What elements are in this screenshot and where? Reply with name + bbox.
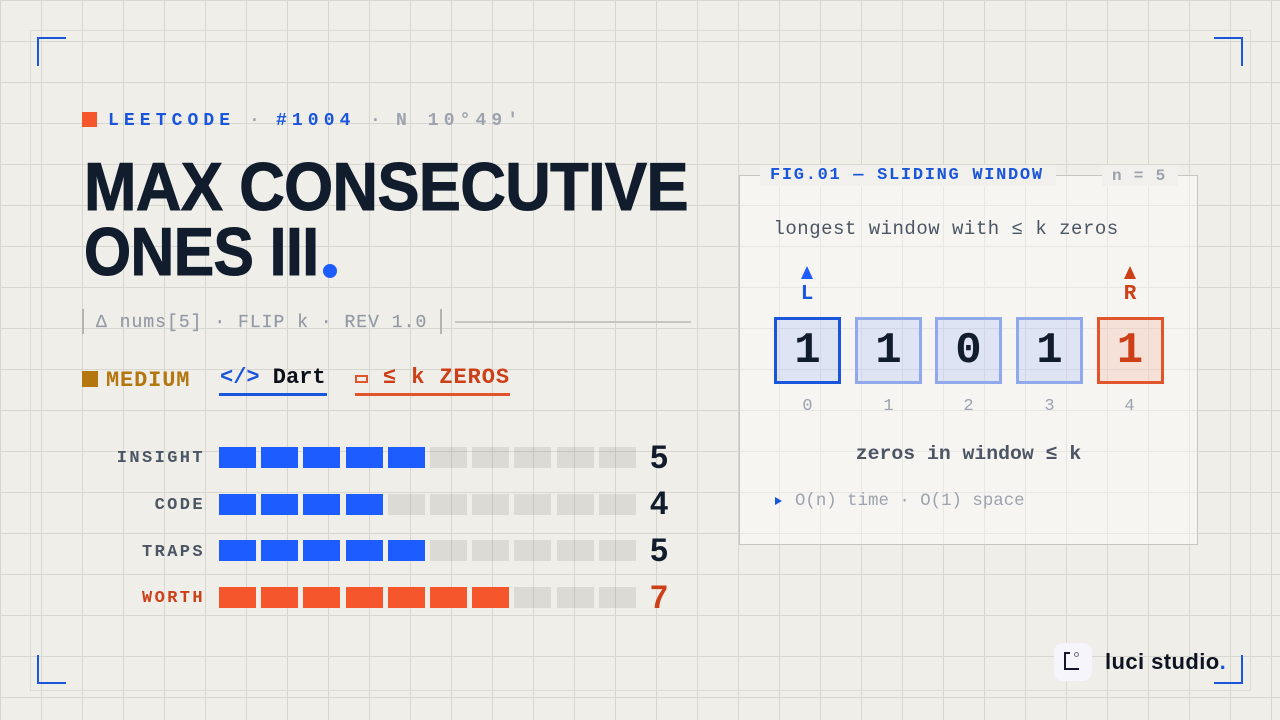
logo icon [1054, 643, 1092, 681]
cell 2 [935, 317, 1002, 384]
meta rule [455, 321, 691, 322]
cell 0 [774, 317, 841, 384]
R text: R [1124, 283, 1136, 306]
logo bracket [1064, 652, 1079, 670]
score: worth: 7 [650, 579, 668, 615]
corner mark: top left [37, 37, 66, 66]
L arrow [800, 266, 812, 279]
cell 1: 1 [875, 326, 902, 376]
complexity note [775, 492, 1025, 511]
eyebrow square [82, 112, 97, 127]
title dot [323, 264, 337, 278]
panel count tag [1102, 165, 1178, 186]
dart text: </> Dart [220, 365, 326, 390]
medium text: MEDIUM [106, 368, 190, 393]
bar: traps [219, 540, 636, 561]
panel subtitle: longest window with ≤ k zeros [774, 218, 1119, 240]
index 3: 3 [1044, 397, 1055, 416]
score: insight: 5 [650, 439, 668, 475]
bar: code [219, 494, 636, 515]
label: worth: WORTH [142, 589, 205, 608]
label: traps: TRAPS [142, 543, 205, 562]
pointer: L [801, 266, 813, 306]
note text: O(n) time · O(1) space [795, 492, 1025, 511]
constraint icon [355, 375, 368, 383]
index 4: 4 [1124, 397, 1135, 416]
title line 2: ONES III [84, 214, 319, 290]
cell 4 [1096, 317, 1164, 384]
eyebrow separator: · [370, 111, 386, 131]
meta text: Δ nums[5] · FLIP k · REV 1.0 [96, 313, 427, 333]
corner mark: bottom left [37, 655, 66, 684]
index 1: 1 [883, 397, 894, 416]
bar: worth [219, 587, 636, 608]
cell 0: 1 [794, 326, 821, 376]
pointer: R [1124, 266, 1136, 306]
cell 2: 0 [955, 326, 982, 376]
index 2: 2 [963, 397, 974, 416]
tag: dart [219, 364, 327, 396]
medium square [82, 371, 98, 387]
panel heading: FIG.01 — SLIDING WINDOW [770, 166, 1044, 185]
L text: L [801, 283, 813, 306]
index 0: 0 [802, 397, 813, 416]
eyebrow coordinates: N 10°49' [396, 111, 523, 131]
bar: insight [219, 447, 636, 468]
eyebrow text [108, 111, 523, 131]
title [84, 149, 688, 290]
corner mark: bottom right [1214, 655, 1243, 684]
panel: sliding window figure [739, 175, 1198, 545]
eyebrow separator: · [249, 111, 265, 131]
eyebrow source: LEETCODE [108, 111, 235, 131]
logo ring [1074, 652, 1079, 657]
score: traps: 5 [650, 532, 668, 568]
logo text: luci studio. [1105, 649, 1226, 674]
note arrow [775, 497, 782, 505]
corner mark: top right [1214, 37, 1243, 66]
eyebrow number: #1004 [276, 111, 356, 131]
label: insight: INSIGHT [117, 449, 205, 468]
label: code: CODE [155, 496, 205, 515]
meta right bar [440, 309, 442, 334]
R arrow [1124, 266, 1136, 279]
meta left bar [82, 309, 84, 334]
constraint text: ≤ k ZEROS [383, 365, 510, 390]
cell 3: 1 [1036, 326, 1063, 376]
title line 1: MAX CONSECUTIVE [84, 149, 688, 225]
cell 4: 1 [1117, 326, 1143, 376]
logo bracket top [1064, 652, 1070, 654]
cell 3 [1016, 317, 1083, 384]
tag: medium [82, 368, 190, 393]
score: code: 4 [650, 485, 668, 521]
window caption: zeros in window ≤ k [856, 443, 1081, 465]
cell 1 [855, 317, 922, 384]
panel count tag: n = 5 [1112, 167, 1167, 185]
logo [1054, 643, 1226, 681]
tag: zeros constraint [355, 364, 510, 396]
